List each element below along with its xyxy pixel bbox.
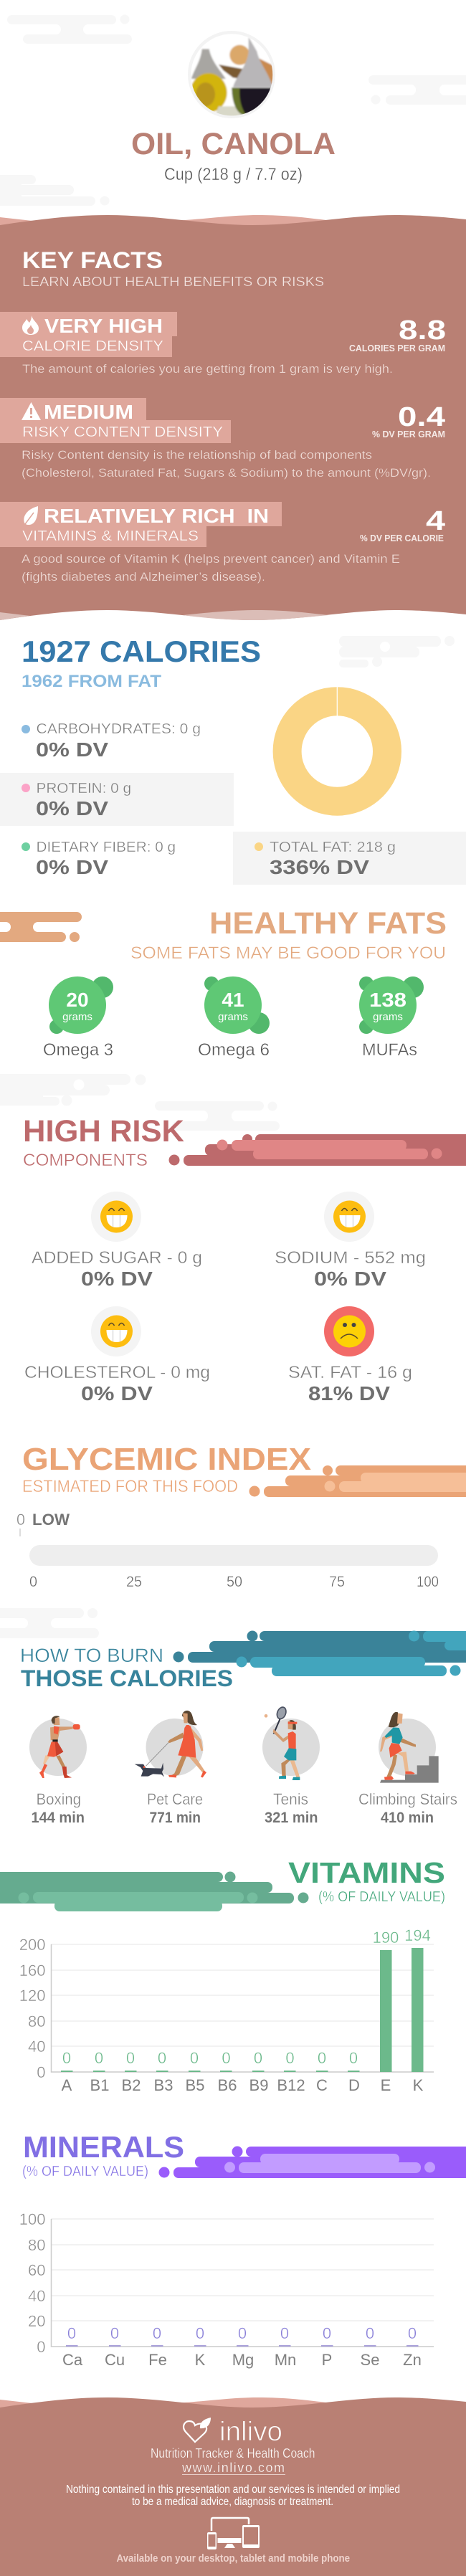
activity: pet care: Pet Care (147, 1790, 203, 1808)
key facts subheading: LEARN ABOUT HEALTH BENEFITS OR RISKS (22, 275, 324, 289)
healthy fats heading: HEALTHY FATS (209, 906, 447, 941)
vitamins subheading: (% OF DAILY VALUE) (318, 1889, 445, 1905)
component: saturated fat: SAT. FAT - 16 g (288, 1363, 412, 1382)
logo: inlivo (184, 2417, 282, 2447)
fact: risky content density: 0.4 (398, 402, 445, 432)
bar chart: vitamins: 40 (28, 2038, 46, 2055)
fact: calorie density: CALORIES PER GRAM (349, 343, 445, 353)
panel: minerals (19, 2130, 466, 2369)
bar chart: vitamins: C (316, 2076, 328, 2094)
bar chart: minerals: 60 (28, 2261, 46, 2279)
component: sodium: 0% DV (314, 1268, 386, 1290)
icon: leaf (24, 506, 38, 525)
glycemic subheading: ESTIMATED FOR THIS FOOD (22, 1477, 238, 1496)
activity: tennis (262, 1705, 320, 1826)
website: www.inlivo.com (181, 2461, 285, 2475)
fat: omega 6: Omega 6 (198, 1040, 270, 1060)
icon: flame (22, 315, 39, 335)
bar chart: vitamins: K (413, 2076, 424, 2094)
fat: omega 6: 41 (222, 989, 244, 1011)
activity: climbing stairs (358, 1712, 457, 1826)
icon: woman on stairs (380, 1712, 439, 1783)
bar chart: vitamins: 0 (349, 2049, 358, 2067)
icon: grin face (100, 1200, 133, 1233)
activity: pet care (135, 1711, 206, 1826)
bar chart: vitamins: B9 (249, 2076, 268, 2094)
component: added sugar: ADDED SUGAR - 0 g (32, 1248, 202, 1268)
bar chart: minerals: K (195, 2351, 206, 2369)
component: cholesterol: CHOLESTEROL - 0 mg (24, 1363, 210, 1382)
bar chart: minerals: 80 (28, 2236, 46, 2254)
fat: omega 3: Omega 3 (43, 1040, 113, 1060)
activity: boxing (29, 1716, 87, 1826)
fact: risky content density: (Cholesterol, Saturated Fat, Sugars & Sodium) to the amount (%DV/gr). (22, 466, 431, 480)
icon: sad face (333, 1315, 366, 1348)
fact: vitamins and minerals: (fights diabetes and Alzheimer’s disease). (22, 570, 265, 584)
macro: dietary fiber: 0% DV (36, 856, 108, 878)
fat: MUFAs: grams (373, 1011, 403, 1023)
bar chart: minerals: 0 (238, 2324, 247, 2342)
activity: tennis: Tenis (273, 1790, 308, 1808)
glycemic scale labels: 25 (126, 1574, 142, 1590)
bar chart: minerals: 0 (323, 2324, 331, 2342)
glycemic scale labels (29, 1574, 439, 1590)
glycemic heading: GLYCEMIC INDEX (22, 1442, 311, 1477)
fact: vitamins and minerals: A good source of Vitamin K (helps prevent cancer) and Vitamin E (22, 552, 400, 566)
bar chart: vitamins: 190 (373, 1929, 399, 1947)
calories from fat: 1962 FROM FAT (22, 672, 161, 691)
bar chart: vitamins: D (348, 2076, 360, 2094)
component: saturated fat (288, 1306, 412, 1405)
glycemic scale labels: 100 (417, 1574, 439, 1590)
bar chart: vitamins: B5 (186, 2076, 204, 2094)
activity: boxing: 144 min (32, 1810, 85, 1826)
availability note: Available on your desktop, tablet and mobile phone (116, 2552, 350, 2565)
macro: carbohydrates: 0% DV (36, 738, 108, 761)
bar chart: minerals: 20 (28, 2312, 46, 2330)
bar chart: vitamins: 0 (222, 2049, 231, 2067)
bar chart: vitamins: B12 (277, 2076, 305, 2094)
component: cholesterol (24, 1306, 210, 1405)
bar chart: vitamins: 80 (28, 2012, 46, 2030)
fat: MUFAs (359, 976, 424, 1060)
cloud: teal (173, 1630, 466, 1676)
activity: climbing stairs: Climbing Stairs (358, 1790, 457, 1808)
high risk heading: HIGH RISK (23, 1114, 184, 1149)
glycemic value: 0 (16, 1511, 25, 1529)
bar chart: minerals: 100 (19, 2210, 46, 2228)
fact: calorie density (0, 312, 446, 376)
icon: grin face (333, 1200, 366, 1233)
component: saturated fat: 81% DV (308, 1382, 390, 1405)
fact: calorie density: CALORIE DENSITY (22, 338, 163, 354)
burn heading line 1: HOW TO BURN (20, 1645, 163, 1666)
serving size: Cup (218 g / 7.7 oz) (164, 165, 303, 184)
cloud: orange (249, 1465, 466, 1497)
fact: calorie density: VERY HIGH (44, 315, 163, 337)
component: added sugar: 0% DV (81, 1268, 153, 1290)
glycemic scale labels: 75 (329, 1574, 345, 1590)
icon: dog walker (135, 1711, 206, 1777)
bar chart: vitamins: 0 (158, 2049, 166, 2067)
fat: omega 3: grams (62, 1011, 92, 1023)
glycemic value: LOW (32, 1511, 70, 1529)
activity: tennis: 321 min (265, 1810, 318, 1826)
macro: protein (0, 773, 234, 826)
activity: boxing: Boxing (36, 1790, 81, 1808)
glycemic scale bar (29, 1545, 438, 1566)
key facts heading: KEY FACTS (22, 247, 163, 273)
fact: risky content density: Risky Content density is the relationship of bad components (22, 448, 372, 462)
macro: protein: PROTEIN: 0 g (36, 781, 131, 797)
panel: vitamins (0, 1856, 445, 2094)
icon: devices (207, 2518, 260, 2549)
burn heading line 2: THOSE CALORIES (21, 1665, 233, 1691)
donut chart (287, 687, 387, 802)
bar chart: minerals: Ca (62, 2351, 83, 2369)
bar chart: vitamins: 0 (62, 2049, 71, 2067)
cloud: orange (0, 912, 82, 942)
panel: high risk components (23, 1114, 466, 1405)
bar chart: vitamins (19, 1926, 434, 2094)
bar chart: vitamins: 0 (95, 2049, 103, 2067)
gray cloud (0, 1608, 99, 1638)
calories heading: 1927 CALORIES (22, 635, 261, 668)
bar chart: vitamins: 0 (318, 2049, 326, 2067)
macro: total fat: 336% DV (270, 856, 369, 878)
macro: total fat: TOTAL FAT: 218 g (270, 840, 396, 855)
glycemic scale labels: 50 (227, 1574, 242, 1590)
component: cholesterol: 0% DV (81, 1382, 153, 1405)
minerals subheading: (% OF DAILY VALUE) (22, 2164, 148, 2180)
minerals heading: MINERALS (23, 2130, 184, 2164)
bar chart: minerals (19, 2210, 434, 2369)
macro: protein: 0% DV (36, 797, 108, 819)
activity: pet care: 771 min (149, 1810, 201, 1826)
bar chart: vitamins: 0 (285, 2049, 295, 2067)
fact: risky content density (0, 398, 445, 480)
bar chart: minerals: 0 (67, 2324, 76, 2342)
bar chart: vitamins: 194 (404, 1926, 431, 1944)
fact: vitamins and minerals: VITAMINS & MINERALS (22, 528, 199, 544)
bar chart: minerals: 40 (28, 2287, 46, 2305)
header clouds (0, 14, 466, 206)
component: added sugar (32, 1192, 202, 1290)
fact: calorie density: The amount of calories you are getting from 1 gram is very high. (22, 362, 393, 376)
food photo (188, 31, 275, 118)
tagline: Nutrition Tracker & Health Coach (151, 2446, 315, 2461)
cloud: green (0, 1871, 308, 1911)
bar chart: minerals: 0 (196, 2324, 204, 2342)
disclaimer: Nothing contained in this presentation and our services is intended or implied (66, 2484, 400, 2496)
activity: climbing stairs: 410 min (381, 1810, 434, 1826)
bar chart: vitamins: B6 (218, 2076, 237, 2094)
fact: risky content density: % DV PER GRAM (372, 429, 445, 439)
bar chart: minerals: Mn (275, 2351, 296, 2369)
icon: boxer (39, 1716, 80, 1778)
disclaimer (66, 2484, 400, 2508)
fact: risky content density: RISKY CONTENT DENSITY (22, 424, 223, 440)
panel: healthy fats (0, 906, 447, 1060)
bar chart: minerals: Fe (148, 2351, 167, 2369)
fact: calorie density: 8.8 (399, 315, 446, 346)
logo: inlivo: inlivo (219, 2417, 282, 2447)
bar chart: vitamins: B3 (154, 2076, 173, 2094)
cloud: red (169, 1134, 466, 1166)
panel: glycemic index (16, 1442, 466, 1590)
fat: MUFAs: 138 (369, 989, 406, 1011)
fact: vitamins and minerals: RELATIVELY RICH IN (44, 505, 269, 527)
fat: omega 3: 20 (66, 989, 89, 1011)
bar chart: minerals: 0 (366, 2324, 374, 2342)
bar chart: minerals: Mg (232, 2351, 254, 2369)
bar chart: minerals: 0 (153, 2324, 161, 2342)
fact: vitamins and minerals: % DV PER CALORIE (360, 533, 444, 543)
macro: dietary fiber (22, 840, 176, 878)
bar chart: vitamins: B1 (90, 2076, 109, 2094)
bar chart: minerals: Se (361, 2351, 379, 2369)
bar chart: minerals: 0 (37, 2338, 46, 2356)
fat: MUFAs: MUFAs (362, 1040, 417, 1060)
bar chart: vitamins: 160 (19, 1962, 46, 1979)
fact: vitamins and minerals: 4 (426, 506, 445, 536)
macro: carbohydrates (22, 721, 201, 761)
high risk subheading: COMPONENTS (23, 1151, 148, 1170)
fat: omega 3 (43, 976, 113, 1060)
fact: vitamins and minerals (0, 502, 445, 584)
panel: calories (0, 635, 466, 885)
macro: carbohydrates: CARBOHYDRATES: 0 g (36, 721, 201, 737)
fat: omega 6: grams (218, 1011, 248, 1023)
icon: warning (22, 402, 41, 420)
glycemic value (16, 1511, 70, 1536)
panel: footer (0, 2397, 466, 2576)
bar chart: vitamins: B2 (122, 2076, 141, 2094)
bar chart: vitamins: 0 (190, 2049, 199, 2067)
macro: total fat (233, 832, 466, 885)
bar chart: minerals: Zn (403, 2351, 422, 2369)
icon: tennis player (265, 1705, 300, 1780)
bar chart: vitamins: 0 (126, 2049, 135, 2067)
bar chart: vitamins: 0 (254, 2049, 262, 2067)
glycemic scale labels: 0 (29, 1574, 37, 1590)
bar chart: minerals: 0 (280, 2324, 289, 2342)
bar chart: vitamins: E (381, 2076, 391, 2094)
fact: risky content density: MEDIUM (44, 401, 133, 423)
bar chart: vitamins: 200 (19, 1936, 46, 1954)
bar chart: minerals: 0 (408, 2324, 417, 2342)
disclaimer: to be a medical advice, diagnosis or treatment. (132, 2496, 333, 2508)
panel: how to burn those calories (20, 1630, 466, 1826)
fat: omega 6 (198, 976, 270, 1060)
healthy fats subheading: SOME FATS MAY BE GOOD FOR YOU (130, 944, 446, 963)
panel: key facts (0, 215, 466, 631)
bar chart: vitamins: A (62, 2076, 72, 2094)
bar chart: minerals: P (322, 2351, 332, 2369)
bar chart: minerals: Cu (105, 2351, 125, 2369)
gray clouds (0, 1074, 280, 1131)
component: sodium: SODIUM - 552 mg (275, 1248, 426, 1268)
bar chart: vitamins: 0 (37, 2063, 46, 2081)
macro: dietary fiber: DIETARY FIBER: 0 g (36, 840, 176, 855)
bar chart: vitamins: 120 (19, 1987, 46, 2005)
title: OIL, CANOLA (131, 127, 336, 161)
cloud: purple (159, 2147, 466, 2178)
component: sodium (275, 1192, 426, 1290)
vitamins heading: VITAMINS (288, 1856, 445, 1889)
bar chart: minerals: 0 (110, 2324, 119, 2342)
icon: grin face (100, 1315, 133, 1348)
